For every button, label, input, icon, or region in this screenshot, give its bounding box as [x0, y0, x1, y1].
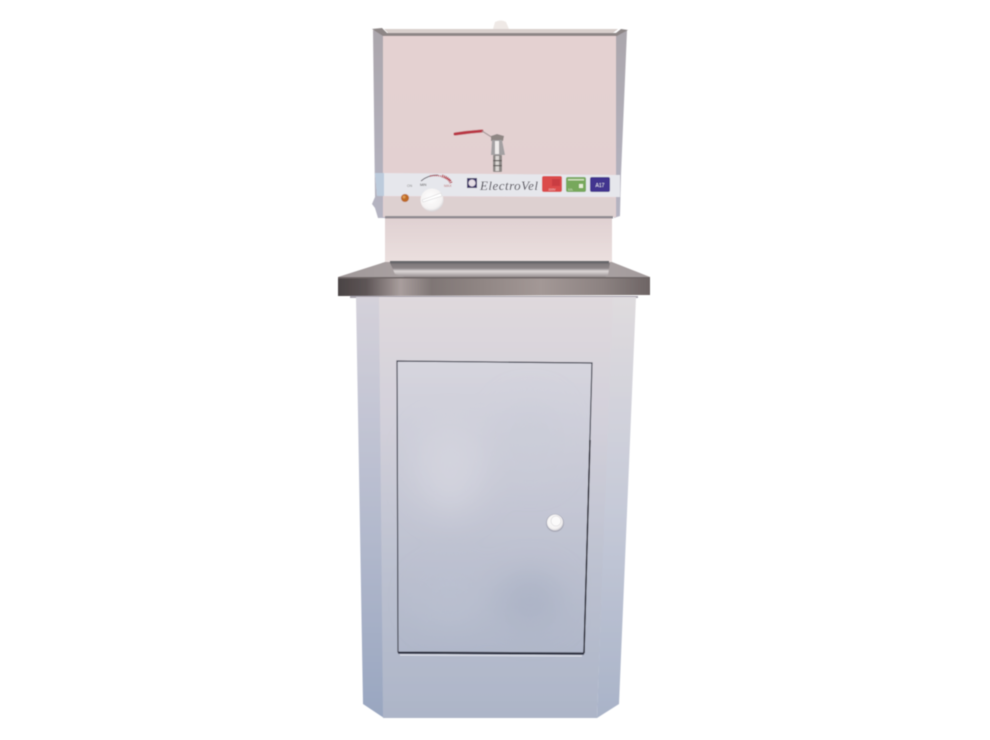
red badge	[542, 176, 562, 192]
top edge	[372, 28, 628, 36]
back panel	[385, 216, 612, 264]
green badge: 12L	[568, 188, 573, 192]
tap body	[491, 140, 505, 155]
stainless steel sink	[338, 261, 650, 298]
back shadow	[390, 261, 609, 264]
water tank	[372, 20, 628, 264]
hanging tab	[493, 20, 509, 29]
cabinet right facet	[597, 297, 636, 718]
blue badge	[590, 177, 610, 192]
red badge: 220V	[548, 188, 556, 192]
door knob	[546, 514, 564, 532]
brand name: ElectroVel	[479, 178, 538, 193]
faucet	[455, 131, 505, 172]
door	[397, 361, 592, 656]
brand logo icon	[467, 178, 477, 188]
temperature gauge	[421, 175, 451, 183]
tank front	[383, 35, 616, 217]
control band	[375, 173, 620, 216]
control band: MIN	[420, 183, 427, 187]
cabinet front	[379, 297, 613, 718]
cabinet	[356, 297, 636, 718]
sink front edge	[338, 278, 650, 296]
blue badge: A17	[596, 183, 605, 189]
indicator lamp	[401, 194, 409, 202]
green badge	[566, 177, 586, 192]
tank side right	[614, 30, 627, 218]
tap head	[491, 134, 504, 141]
sink top	[338, 262, 650, 277]
shadow under sink	[350, 296, 638, 298]
cabinet left facet	[356, 297, 384, 718]
temperature knob	[420, 188, 444, 212]
red lever	[455, 131, 482, 134]
door outline	[397, 361, 592, 653]
bottom shade	[385, 216, 613, 218]
tiny labels: ON	[407, 184, 413, 188]
tank side left	[372, 30, 385, 218]
control band: MAX	[444, 184, 452, 188]
basin	[390, 263, 610, 278]
door mottling	[416, 400, 562, 628]
